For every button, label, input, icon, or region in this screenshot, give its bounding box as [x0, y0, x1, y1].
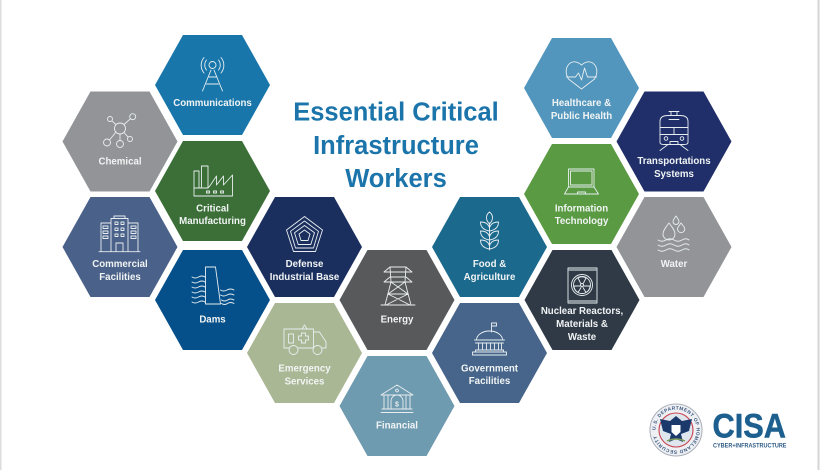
panel: Food & Agriculture	[432, 197, 547, 297]
label: Agriculture	[464, 272, 516, 283]
label: Facilities	[99, 272, 141, 283]
icon: radio tower	[201, 58, 224, 91]
panel: Energy	[340, 250, 454, 350]
panel: Chemical	[62, 92, 178, 192]
label	[278, 364, 331, 388]
label	[555, 204, 609, 227]
label: Facilities	[469, 376, 510, 387]
label: Critical	[196, 204, 229, 215]
label: Waste	[568, 332, 597, 343]
panel: Communications	[155, 35, 270, 135]
label: Government	[461, 364, 519, 375]
title: Workers	[345, 165, 447, 193]
label	[179, 204, 246, 227]
label: Nuclear Reactors,	[541, 306, 623, 317]
panel: Financial	[340, 356, 454, 456]
label: Emergency	[278, 364, 331, 375]
logo: CISA wordmark: CISA	[712, 408, 786, 446]
label: Information	[555, 204, 608, 215]
icon: ambulance	[284, 325, 326, 354]
panel: Dams	[155, 250, 270, 350]
panel: Information Technology	[524, 144, 639, 244]
logo: CISA wordmark: CYBER+INFRASTRUCTURE	[713, 444, 786, 450]
title: Essential Critical	[293, 98, 499, 126]
icon: dam with water	[192, 267, 234, 304]
label	[464, 259, 516, 283]
icon: power pylon	[381, 267, 415, 305]
logo: DHS seal: U.S. DEPARTMENT OF HOMELAND SECURITY	[652, 406, 700, 454]
icon: molecule	[104, 114, 136, 148]
icon: laptop	[564, 169, 598, 194]
label: Energy	[381, 315, 414, 326]
label: Services	[285, 376, 324, 388]
label: Healthcare &	[552, 98, 611, 109]
label	[551, 98, 612, 122]
icon: radioactive barrel	[568, 268, 597, 303]
label: Public Health	[551, 111, 612, 122]
panel: Government Facilities	[432, 303, 547, 403]
label	[637, 156, 711, 180]
panel: Nuclear Reactors, Materials & Waste	[524, 250, 640, 350]
label: Chemical	[98, 156, 142, 168]
label	[270, 259, 340, 283]
panel: Transportations Systems	[616, 92, 732, 192]
label	[541, 306, 623, 343]
icon: capitol building	[472, 323, 506, 355]
label	[92, 259, 148, 283]
icon: heart with pulse	[566, 62, 597, 89]
label: Systems	[654, 169, 694, 180]
icon: bank	[381, 385, 413, 412]
label: Materials &	[556, 319, 608, 330]
label: Defense	[286, 259, 324, 270]
icon: factory	[194, 166, 232, 196]
panel: Critical Manufacturing	[155, 141, 270, 241]
icon: office building	[99, 216, 140, 252]
icon: train	[660, 112, 688, 150]
icon: water drops and waves	[658, 216, 689, 251]
panel: Commercial Facilities	[62, 197, 178, 297]
icon: dollar sign: $	[395, 402, 399, 408]
panel: Defense Industrial Base	[247, 197, 362, 297]
label: Transportations	[637, 156, 711, 167]
icon: pentagon	[286, 216, 322, 252]
panel: Emergency Services	[247, 303, 362, 403]
label: Food &	[473, 259, 506, 270]
panel: Water	[616, 197, 732, 297]
label: Technology	[555, 216, 609, 227]
title	[293, 98, 499, 193]
icon: wheat	[480, 212, 498, 250]
label: Manufacturing	[179, 216, 246, 227]
label: Communications	[173, 98, 252, 109]
label: Commercial	[92, 259, 148, 270]
label	[461, 364, 519, 387]
panel: Healthcare & Public Health	[524, 38, 639, 138]
label: Water	[661, 259, 688, 270]
label: Industrial Base	[270, 272, 340, 283]
label: Dams	[199, 315, 226, 326]
label: Financial	[376, 421, 418, 432]
title: Infrastructure	[313, 132, 479, 160]
